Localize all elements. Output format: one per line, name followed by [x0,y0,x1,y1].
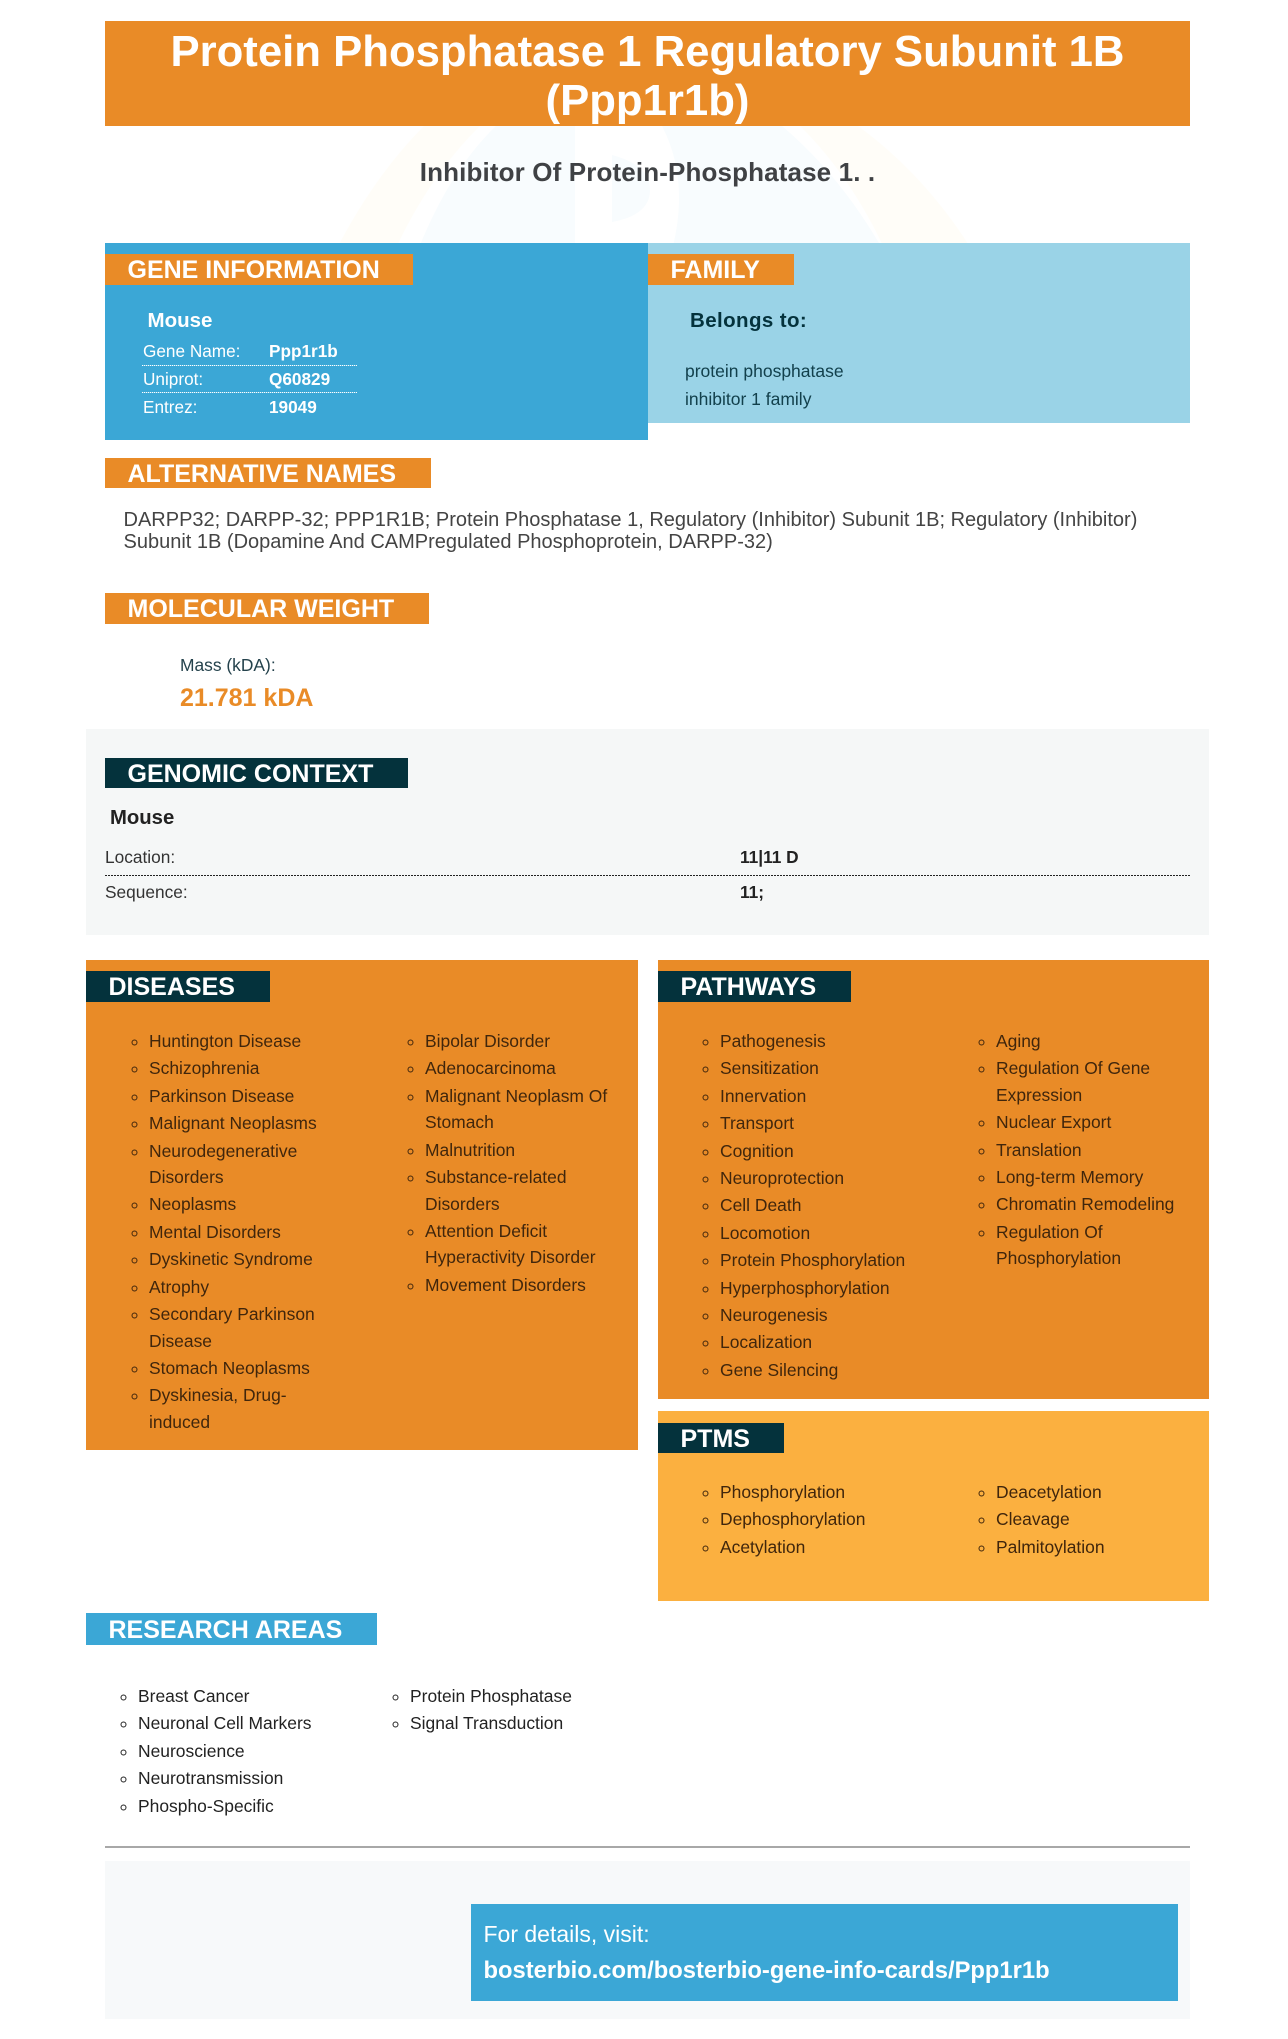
uniprot row [142,369,357,393]
list: diseases column 2: Substance-related Disorders [425,1167,567,1214]
list: pathways column 2: Chromatin Remodeling [996,1194,1174,1214]
heading: alternative names: ALTERNATIVE NAMES [128,460,396,488]
gene name row: Gene Name: [143,341,240,361]
list: diseases column 1: Parkinson Disease [149,1086,294,1106]
list: diseases column 1: Atrophy [149,1277,209,1297]
panel: family [648,243,1190,423]
mass value: 21.781 kDA [180,684,313,712]
list: research areas column 2: Signal Transduction [410,1713,563,1733]
list: ptms column 1: Phosphorylation [720,1482,845,1502]
list: pathways column 1: Pathogenesis [720,1031,826,1051]
entrez row: Entrez: [143,397,197,417]
list: diseases column 1: Stomach Neoplasms [149,1358,310,1378]
list: pathways column 1: Cognition [720,1141,794,1161]
list: diseases column 2: Movement Disorders [425,1275,586,1295]
list: diseases column 1: Neurodegenerative Disorders [149,1141,297,1187]
panel: footer [105,1861,1190,2019]
footer divider [105,1846,1190,1848]
location row [105,847,1190,876]
heading: family [648,254,794,285]
list: pathways column 2: Aging [996,1031,1041,1051]
title banner: (Ppp1r1b) [546,76,749,125]
heading: research areas: RESEARCH AREAS [108,1616,342,1644]
mass label: Mass (kDA): [180,655,276,675]
callout label: For details, visit: [484,1921,650,1947]
list: pathways column 2: Nuclear Export [996,1112,1111,1132]
list: pathways column 1: Locomotion [720,1223,810,1243]
background watermark logo [0,120,1288,250]
panel: diseases [86,960,638,1450]
uniprot row: Q60829 [269,369,330,389]
list: pathways column 2: Translation [996,1140,1082,1160]
list: pathways column 2: Regulation Of Phosphorylation [996,1222,1121,1268]
belongs to label: Belongs to: [690,309,807,332]
entrez row: 19049 [269,397,317,417]
list: pathways column 1: Sensitization [720,1058,819,1078]
panel: ptms [658,1411,1209,1601]
list: pathways column 2: Regulation Of Gene Expression [996,1058,1150,1105]
list: diseases column 1: Dyskinetic Syndrome [149,1249,313,1269]
list: pathways column 1 [702,1031,905,1380]
gene name row [142,341,357,366]
list: ptms column 1: Dephosphorylation [720,1509,865,1529]
location row: Location: [105,847,175,867]
heading: gene information: GENE INFORMATION [128,256,380,284]
heading: diseases [86,971,270,1002]
title banner [105,21,1190,126]
list: pathways column 1: Cell Death [720,1195,801,1215]
list: diseases column 2: Adenocarcinoma [425,1058,556,1078]
heading: genomic context: GENOMIC CONTEXT [128,760,373,788]
list: research areas column 1 [120,1686,311,1816]
list: diseases column 1: Dyskinesia, Drug-induced [149,1385,287,1432]
list: pathways column 2 [978,1031,1174,1268]
alternative names text: DARPP32; DARPP-32; PPP1R1B; Protein Phosphatase 1, Regulatory (Inhibitor) Subunit 1B; Regulatory (Inhibitor) Subunit 1B (Dopamine And CAMPregulated Phosphoprotein, DARPP-32) [124,509,1137,553]
list: ptms column 2: Palmitoylation [996,1537,1105,1557]
family name [685,361,844,409]
list: ptms column 2 [978,1482,1105,1557]
list: research areas column 1: Neurotransmission [138,1768,283,1788]
entrez row [143,397,317,417]
list: diseases column 1: Secondary Parkinson Disease [149,1304,315,1351]
list: diseases column 2: Attention Deficit Hyperactivity Disorder [425,1221,596,1267]
list: diseases column 2: Malignant Neoplasm Of Stomach [425,1086,607,1132]
heading: pathways [658,971,851,1002]
list: research areas column 2 [392,1686,572,1733]
species label: Mouse [110,807,174,829]
list: ptms column 1: Acetylation [720,1537,805,1557]
list: ptms column 2: Deacetylation [996,1482,1102,1502]
list: pathways column 1: Innervation [720,1086,806,1106]
list: diseases column 1: Malignant Neoplasms [149,1113,317,1133]
list: pathways column 1: Hyperphosphorylation [720,1278,890,1298]
list: diseases column 1 [132,1031,317,1432]
heading: ptms [658,1423,784,1453]
list: diseases column 1: Huntington Disease [149,1031,301,1051]
list: diseases column 2: Bipolar Disorder [425,1031,550,1051]
heading: ptms: PTMS [680,1425,750,1453]
list: research areas column 1: Phospho-Specific [138,1796,274,1816]
list: pathways column 2: Long-term Memory [996,1167,1143,1187]
panel: pathways [658,960,1209,1399]
gene name row: Ppp1r1b [269,341,338,361]
list: ptms column 2: Cleavage [996,1509,1070,1529]
family name: inhibitor 1 family [685,389,811,409]
sequence row: Sequence: [105,882,188,902]
location row: 11|11 D [740,847,799,867]
list: pathways column 1: Transport [720,1113,794,1133]
family name: protein phosphatase [685,361,844,381]
panel: gene information [105,243,648,440]
list: pathways column 1: Protein Phosphorylation [720,1250,905,1270]
heading: pathways: PATHWAYS [680,973,816,1001]
list: pathways column 1: Neuroprotection [720,1168,844,1188]
list: pathways column 1: Gene Silencing [720,1360,838,1380]
heading: family: FAMILY [670,256,760,284]
sequence row: 11; [740,882,764,902]
heading: molecular weight: MOLECULAR WEIGHT [128,595,394,623]
list: research areas column 1: Neuroscience [138,1741,245,1761]
list: research areas column 1: Neuronal Cell Markers [138,1713,311,1733]
species label: Mouse [148,309,212,332]
uniprot row: Uniprot: [143,369,203,389]
title banner: Protein Phosphatase 1 Regulatory Subunit 1B [170,27,1124,76]
heading: diseases: DISEASES [108,973,235,1001]
list: pathways column 1: Localization [720,1332,812,1352]
list: diseases column 1: Mental Disorders [149,1222,281,1242]
list: diseases column 2: Malnutrition [425,1140,515,1160]
list: research areas column 1: Breast Cancer [138,1686,249,1706]
panel: genomic context [86,729,1209,935]
list: ptms column 1 [702,1482,865,1557]
list: pathways column 1: Neurogenesis [720,1305,828,1325]
list: diseases column 2 [408,1031,608,1295]
callout url: bosterbio.com/bosterbio-gene-info-cards/Ppp1r1b [484,1957,1050,1984]
sequence row [105,882,764,902]
list: diseases column 1: Neoplasms [149,1194,236,1214]
list: research areas column 2: Protein Phosphatase [410,1686,572,1706]
subtitle: Inhibitor Of Protein-Phosphatase 1. . [420,157,875,187]
list: diseases column 1: Schizophrenia [149,1058,260,1078]
callout: details link [471,1904,1178,2001]
